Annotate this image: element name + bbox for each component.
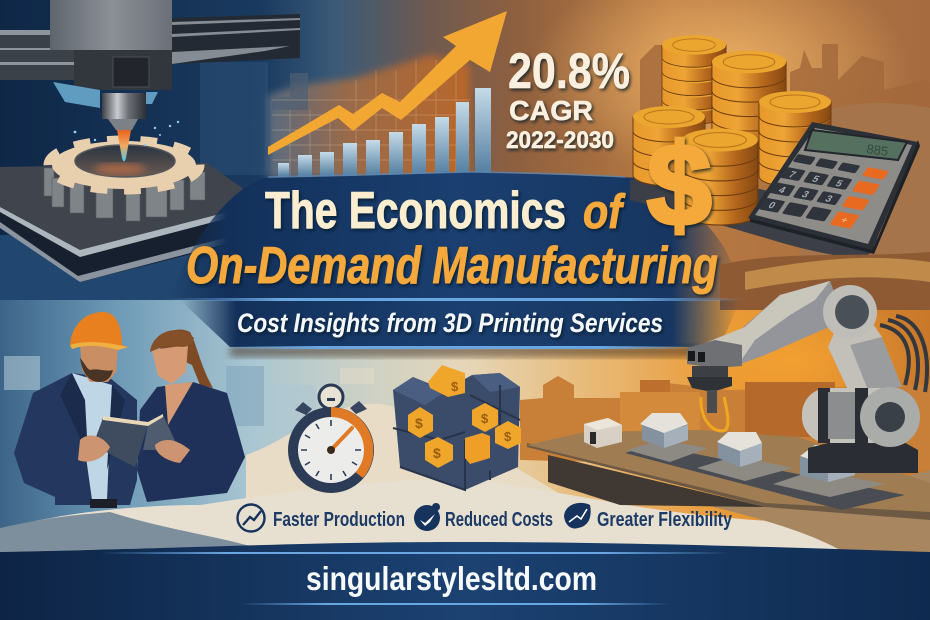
- footer lines: [100, 552, 730, 554]
- title band: [170, 172, 740, 300]
- footer band: [0, 542, 930, 620]
- right sand ground: [640, 470, 930, 556]
- book: [93, 414, 177, 467]
- stat: 20.8% CAGR: 20.8%: [508, 43, 630, 99]
- background: tan hill right: [800, 103, 930, 290]
- robot gripper: [687, 340, 742, 413]
- coin stack 4: [633, 106, 705, 186]
- gold hex 3: $: [481, 411, 489, 426]
- benefit: faster production: [238, 504, 405, 532]
- dial ticks: [301, 420, 361, 480]
- printed cube: [584, 418, 622, 448]
- benefit: greater flexibility: [564, 503, 733, 531]
- arrow: growth: [268, 11, 507, 155]
- gold hex 4: $: [504, 429, 512, 444]
- sand streak right: [745, 258, 930, 290]
- build plate: [0, 163, 263, 282]
- gold block middle: [465, 433, 490, 464]
- gold hex 1: $: [415, 415, 423, 431]
- coin stack 2: [712, 51, 786, 145]
- hard hat: [70, 312, 128, 350]
- calculator keys: [757, 154, 889, 229]
- background: lower half: [0, 300, 930, 550]
- stat: 20.8% CAGR: [506, 43, 630, 154]
- robot arm: [687, 281, 927, 473]
- robot base: [808, 440, 918, 473]
- background blocks in factory: [520, 376, 930, 470]
- website: singularstylesltd.com: [306, 560, 597, 597]
- icon: trend circle: [238, 504, 264, 532]
- coin stack 1: [662, 35, 726, 124]
- laser flame: [117, 130, 131, 162]
- dividers: [165, 298, 745, 301]
- hand: [331, 428, 352, 450]
- background: orange glow behind robot: [660, 290, 920, 430]
- machine rails: [0, 14, 300, 80]
- brown hills right: [720, 252, 930, 310]
- calculator key digits: 0: [766, 201, 778, 211]
- shadow under subtitle band: [230, 345, 700, 357]
- woman: [137, 329, 245, 502]
- benefit: faster production: Faster Production: [273, 509, 405, 531]
- background: warm glow: [530, 0, 910, 180]
- printed part 2: [697, 432, 793, 481]
- robot joint: [802, 387, 920, 447]
- calculator key digits: 3: [823, 194, 835, 205]
- calculator display: 885: [866, 141, 889, 159]
- chart: rising bars and grid: [268, 55, 491, 178]
- man: [14, 312, 137, 508]
- calculator key digits: 3: [799, 190, 811, 200]
- calculator key digits: 4: [776, 185, 788, 196]
- background: top half: [0, 0, 930, 320]
- calculator key digits: +: [838, 215, 850, 226]
- people: engineer and colleague: [14, 312, 245, 508]
- chart backdrop: [268, 55, 470, 178]
- calculator: [748, 122, 920, 254]
- bars: [278, 88, 491, 177]
- robot forearm: [738, 281, 845, 365]
- robot elbow: [823, 285, 877, 339]
- glow ring: [701, 397, 728, 431]
- gold hex 2: $: [433, 445, 441, 461]
- subtitle: Cost Insights from 3D Printing Services: [237, 308, 663, 338]
- calculator key digits: 7: [786, 170, 798, 181]
- sparks: [74, 121, 179, 146]
- gold block top: $: [451, 379, 459, 394]
- calculator key digits: 5: [833, 179, 845, 189]
- icon: dollar sign: $: [647, 120, 712, 250]
- panel: 3D printer machine: [0, 0, 300, 282]
- title: [186, 182, 718, 295]
- print head: [50, 0, 172, 130]
- hands: [78, 436, 190, 463]
- printed part 3: [773, 445, 885, 497]
- calculator key digits: 5: [810, 174, 822, 185]
- robot upper arm: [828, 337, 902, 390]
- ground under calculator: [630, 178, 878, 258]
- background: ghost data panels: [4, 356, 374, 435]
- chart ghost buildings: [272, 73, 308, 110]
- benefit: reduced costs: [414, 503, 553, 531]
- coins: [633, 35, 831, 225]
- band top highlight: [268, 172, 625, 177]
- background: city skyline: [640, 44, 930, 125]
- calculator key digits: [765, 170, 871, 226]
- benefit: greater flexibility: Greater Flexibility: [597, 509, 733, 531]
- icon: flexible arrow badge: [564, 503, 591, 528]
- table: [527, 430, 930, 520]
- background: machine room columns: [200, 62, 268, 175]
- stat: 20.8% CAGR: 2022-2030: [506, 127, 614, 154]
- left shadow ground: [0, 512, 250, 552]
- benefit: reduced costs: Reduced Costs: [445, 509, 553, 531]
- gear top face: [49, 141, 199, 189]
- title: of: [583, 186, 625, 239]
- background: floor under machine: [0, 235, 300, 305]
- cost block stack: [393, 365, 521, 490]
- coin stack 3: [759, 91, 831, 187]
- coin stack 5: [682, 128, 758, 225]
- grid lines: [272, 60, 470, 176]
- hill behind stopwatch: [246, 404, 570, 530]
- icon: check badge: [414, 503, 440, 531]
- crown: [319, 385, 343, 409]
- title: On-Demand Manufacturing: [186, 237, 718, 295]
- printed part 1: [627, 413, 708, 462]
- ground waves: [0, 478, 930, 556]
- robot cables: [880, 316, 927, 392]
- title: The Economics: [265, 182, 566, 240]
- stat: 20.8% CAGR: CAGR: [509, 95, 593, 126]
- subtitle band: [180, 300, 740, 347]
- gear teeth sides: [44, 168, 205, 221]
- stopwatch: [288, 385, 374, 493]
